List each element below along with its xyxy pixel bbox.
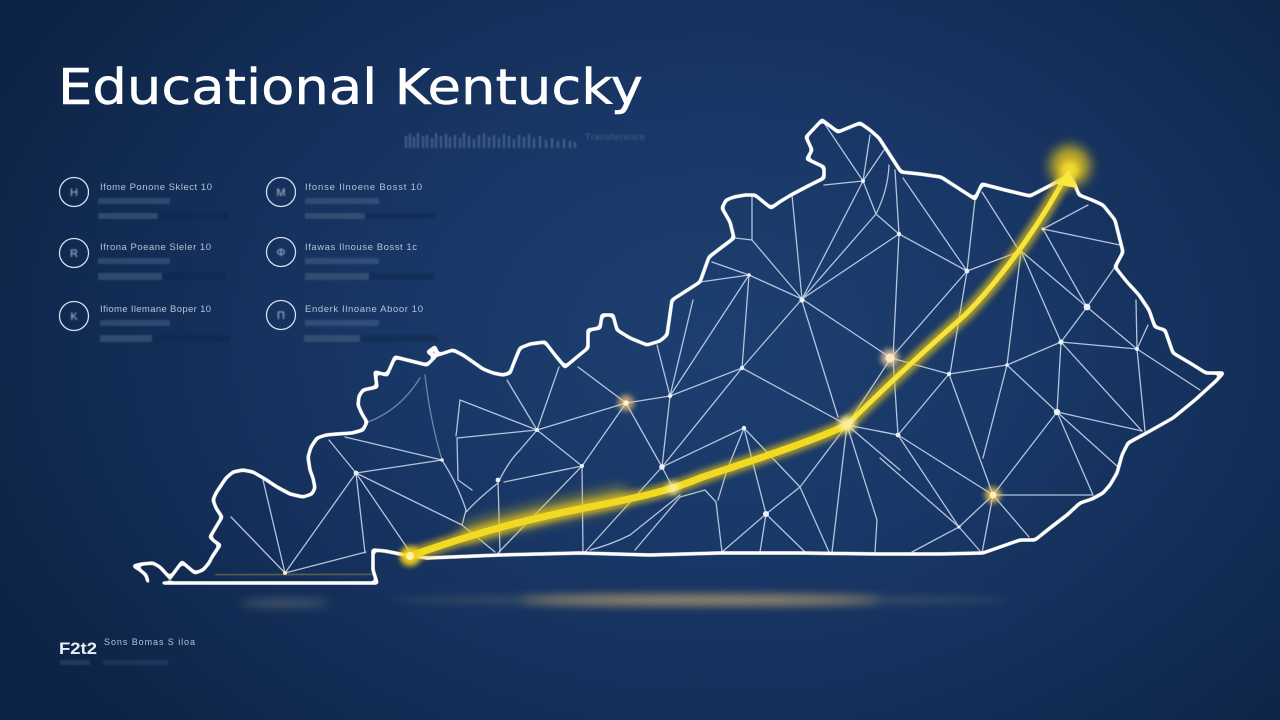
stat item 6: Enderk Ilnoane Aboor 10 — [305, 304, 423, 315]
stat item 2: Ifonse Ilnoene Bosst 10 — [305, 182, 422, 193]
stat item 3: R — [70, 248, 78, 260]
glowing growth line — [410, 172, 1068, 556]
stat item 1 — [60, 178, 228, 219]
stat item 6 — [266, 300, 438, 342]
faint mini chart under title: Transference — [585, 132, 645, 142]
stat item 4 — [266, 238, 434, 280]
stat item 3 — [60, 238, 226, 280]
footer source: F2t2 — [59, 639, 97, 658]
network nodes — [354, 179, 1139, 529]
stat item 2: M — [276, 187, 286, 199]
gold nodes — [283, 349, 1001, 575]
panel: left stats grid — [60, 178, 438, 342]
glow: arrow tip — [1050, 146, 1090, 188]
reflection lights below map — [240, 594, 1010, 606]
stat item 1: H — [70, 187, 78, 199]
faint mini chart under title — [406, 132, 645, 148]
stat item 2 — [266, 178, 436, 219]
stat item 5 — [60, 302, 230, 342]
map outline of Kentucky — [134, 120, 1223, 583]
stat item 3: Ifrona Poeane Sleler 10 — [100, 242, 211, 253]
footer source — [59, 637, 195, 665]
faint gold base line under west map — [215, 574, 372, 575]
glow: mid points — [667, 416, 855, 494]
stat item 4: Ifawas Ilnouse Bosst 1c — [305, 242, 417, 253]
stat item 1: Ifome Ponone Sklect 10 — [100, 182, 212, 193]
stat item 4: Φ — [277, 247, 286, 259]
stat item 6: Π — [277, 310, 285, 322]
stat item 5: Ifiome Ilemane Boper 10 — [100, 304, 211, 315]
stat item 5: K — [70, 311, 78, 323]
footer source: Sons Bomas S iloa — [104, 637, 195, 647]
network lines inside map — [231, 120, 1200, 573]
title: Educational Kentucky — [58, 59, 643, 116]
glow: line start — [400, 546, 420, 566]
